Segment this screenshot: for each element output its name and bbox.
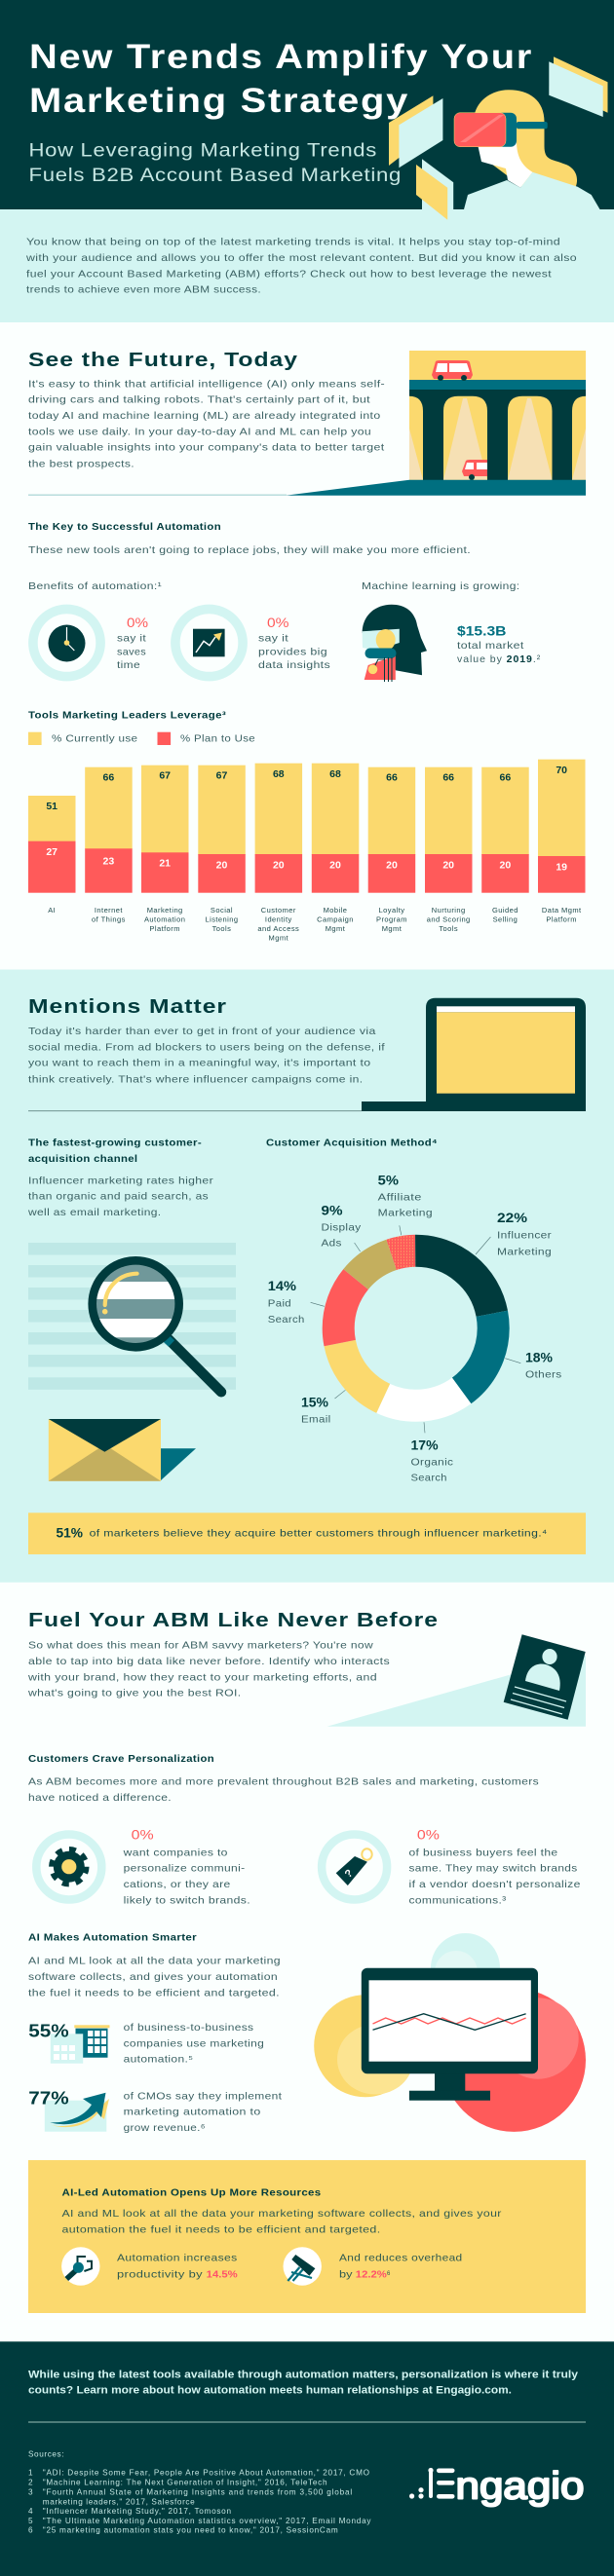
category labels: Listening (205, 915, 239, 923)
subtitle (29, 140, 402, 186)
stat: want personalization: personalize communi- (124, 1863, 246, 1875)
legend (28, 732, 255, 745)
stat: business buyers: same. They may switch brands (409, 1863, 577, 1875)
heading: Mentions Matter: Mentions Matter (28, 996, 227, 1018)
illustration: woman in VR headset (389, 56, 608, 220)
panel: AI-led automation (28, 2160, 586, 2313)
stat: saves time: say it (117, 632, 146, 644)
sources: "Fourth Annual State of Marketing Insights and trends from 3,500 global (43, 2488, 352, 2497)
values: currently use: 66 (386, 772, 398, 784)
icon: calendars (51, 2025, 109, 2064)
text: ABM prevalent: As ABM becomes more and more prevalent throughout B2B sales and marketing, customers (28, 1776, 539, 1788)
stat: 55%: automation.⁵ (124, 2054, 193, 2066)
stat: overhead: 12.2% (356, 2268, 388, 2280)
chart lines (372, 2014, 526, 2030)
subheading: fastest growing: The fastest-growing customer- (28, 1139, 202, 1149)
stat: productivity: Automation increases (117, 2253, 238, 2264)
heading: Fuel Your ABM: Fuel Your ABM Like Never Before (28, 1610, 439, 1631)
category labels: Marketing (147, 906, 183, 915)
hair (474, 90, 577, 190)
donut labels (268, 1173, 561, 1484)
text: influencer rates: than organic and paid search, as (28, 1191, 209, 1203)
values: currently use (46, 765, 567, 812)
legend: % Currently use (52, 733, 137, 745)
body text: AI intro: It's easy to think that artificial intelligence (AI) only means self- (28, 378, 385, 390)
category labels: Selling (493, 915, 518, 923)
values: plan to use: 20 (329, 860, 341, 872)
stat: 77%: marketing automation to (124, 2107, 261, 2118)
body text: mentions: you want to reach them in a meaningful way, it's important to (28, 1058, 370, 1069)
values: currently use: 68 (273, 768, 285, 780)
stat: market value: total market (457, 640, 524, 652)
values: plan to use: 27 (46, 846, 58, 858)
text: AI and ML (28, 1956, 281, 1998)
closing statement (28, 2370, 579, 2397)
light beams (409, 398, 586, 480)
face (478, 141, 532, 188)
stat: saves time: saves (117, 646, 146, 657)
logo: Engagio: ngagio (456, 2466, 585, 2508)
text: AI and ML: the fuel it needs to be efficient and targeted. (28, 1987, 280, 1998)
panel text: AI and ML look at all the data your marketing software collects, and gives your (62, 2208, 502, 2220)
car bottom (462, 460, 487, 480)
category labels: Internet (95, 906, 123, 915)
values: plan to use: 19 (556, 862, 567, 874)
donut labels: 9% (322, 1203, 343, 1217)
body text: AI intro: gain valuable insights into your company's data to better target (28, 442, 384, 454)
category labels: Tools (212, 924, 231, 933)
subheading: personalization: Customers Crave Personalization (28, 1754, 214, 1765)
subheading: fastest growing: acquisition channel (28, 1154, 137, 1165)
bars: plan to use (28, 841, 585, 893)
body text: mentions (28, 1026, 385, 1085)
donut labels: Paid (268, 1298, 291, 1310)
panel text (62, 2208, 502, 2235)
stat: productivity: 14.5% (207, 2268, 238, 2280)
bridge piers (409, 390, 586, 480)
donut labels: Ads (322, 1237, 342, 1249)
icon: gear (36, 1835, 101, 1899)
illustration: monitor with chart (314, 1933, 586, 2132)
stat: saves time (117, 616, 148, 671)
category labels: Campaign (317, 915, 354, 923)
category labels: Customer (261, 906, 296, 915)
values: plan to use: 23 (103, 855, 114, 867)
body text: mentions: social media. From ad blockers to users being on the defense, if (28, 1041, 385, 1053)
category labels: Data Mgmt (542, 906, 582, 915)
category labels: Mgmt (269, 933, 289, 942)
title (29, 38, 533, 120)
stat: 77%: of CMOs say they implement (124, 2090, 282, 2102)
category labels: and Scoring (427, 915, 471, 923)
donut labels: Marketing (497, 1246, 552, 1257)
stat: overhead: And reduces overhead (339, 2253, 462, 2264)
stat: 55%: companies use marketing (124, 2037, 264, 2049)
icon: magnifying glass (93, 1260, 221, 1392)
logo: Engagio (409, 2466, 585, 2508)
body text: AI intro: tools we use daily. In your day-to-day AI and ML can help you (28, 426, 371, 437)
sources: 2 (28, 2479, 33, 2487)
donut chart (338, 1251, 493, 1405)
sources (28, 2449, 371, 2535)
sources: 5 (28, 2517, 33, 2525)
text: AI and ML: AI and ML look at all the data your marketing (28, 1956, 281, 1967)
stat: data insights: data insights (258, 659, 330, 671)
panel text: automation the fuel it needs to be efficient and targeted. (62, 2223, 380, 2235)
stat: 55%: of business-to-business (124, 2022, 253, 2034)
category labels: Mgmt (382, 924, 403, 933)
body text: fuel: what's going to give you the best ROI. (27, 1688, 242, 1699)
text: ABM prevalent (28, 1776, 539, 1804)
sources: marketing leaders," 2017, Salesforce (43, 2497, 195, 2506)
illustration: profile card (327, 1634, 586, 1727)
stat: business buyers: of business buyers feel the (409, 1847, 557, 1858)
closing statement: While using the latest tools available through automation matters, personalization is where it truly (28, 2370, 579, 2381)
donut labels: Organic (411, 1456, 453, 1468)
category labels: Automation (144, 915, 185, 923)
text: more efficient: These new tools aren't going to replace jobs, they will make you more efficient. (28, 544, 471, 556)
donut labels: Email (301, 1413, 331, 1425)
category labels: Mgmt (326, 924, 346, 933)
stat: business buyers (409, 1827, 581, 1907)
title: New Trends Amplify Your (29, 38, 533, 76)
illustration: bridge with cars (28, 351, 586, 496)
category labels: AI (48, 906, 56, 915)
body text: fuel: So what does this mean for ABM savvy marketers? You're now (28, 1640, 373, 1652)
car top (432, 360, 473, 381)
stat: business buyers: if a vendor doesn't personalize (409, 1879, 581, 1890)
values: plan to use (46, 846, 567, 874)
category labels: Platform (149, 924, 180, 933)
donut labels: Marketing (378, 1208, 433, 1219)
sources: "Machine Learning: The Next Generation of Insight," 2016, TeleTech (43, 2479, 327, 2487)
stat: data insights (258, 616, 330, 671)
callout: 51% of marketers: 51% (57, 1525, 83, 1540)
stat: 77% (28, 2088, 282, 2134)
bar chart: tools (28, 760, 585, 942)
floating panel left (389, 95, 442, 168)
icon: rising arrow (45, 2093, 109, 2132)
callout: 51% of marketers (28, 1512, 586, 1554)
donut labels: 15% (301, 1395, 328, 1409)
sources: "ADI: Despite Some Fear, People Are Positive About Automation," 2017, CMO (43, 2469, 369, 2478)
donut labels: Display (322, 1221, 362, 1233)
values: plan to use: 20 (500, 860, 511, 872)
body text: mentions: think creatively. That's where influencer campaigns come in. (28, 1073, 363, 1085)
category labels: Guided (492, 906, 518, 915)
values: plan to use: 20 (386, 860, 398, 872)
text: AI and ML: software collects, and gives your automation (28, 1971, 278, 1983)
stat: want personalization: want companies to (122, 1847, 228, 1858)
document stripes (28, 1243, 236, 1390)
intro text: with your audience and allows you to offer the most relevant content. But did you know it can also (25, 252, 577, 264)
stat: market value: $15.3B (457, 623, 507, 638)
subtitle: Fuels B2B Account Based Marketing (29, 165, 402, 186)
donut labels: Search (268, 1314, 305, 1325)
sources: 4 (28, 2507, 33, 2516)
bars: currently use (28, 760, 585, 857)
headset (454, 113, 548, 147)
donut labels: 22% (497, 1211, 527, 1225)
category labels: Social (211, 906, 233, 915)
body text: mentions: Today it's harder than ever to get in front of your audience via (28, 1026, 376, 1037)
category labels (48, 906, 582, 942)
heading: See the Future, Today: See the Future, Today (28, 350, 298, 371)
sources: 1 (28, 2469, 33, 2478)
panel: Mentions Matter (0, 970, 614, 1583)
icon: price tag (322, 1835, 387, 1899)
values: plan to use: 20 (442, 860, 454, 872)
category labels: Identity (265, 915, 292, 923)
text: influencer rates (27, 1175, 213, 1218)
values: plan to use: 20 (216, 860, 227, 872)
floating panel right (549, 56, 608, 117)
stat: productivity: productivity by (117, 2268, 204, 2280)
body text: AI intro: today AI and machine learning (ML) are already integrated into (28, 410, 381, 422)
stat: data insights: 0% (267, 616, 288, 630)
stat: want personalization: 0% (132, 1827, 154, 1842)
icon: clock (33, 609, 100, 677)
category labels: Mobile (324, 906, 347, 915)
stat: 55% (28, 2021, 264, 2066)
body text: AI intro (28, 378, 385, 469)
panel: header (0, 0, 614, 209)
stat: saves time: time (117, 659, 140, 671)
values: currently use: 66 (103, 772, 114, 784)
donut labels: 14% (268, 1279, 296, 1293)
values: plan to use: 21 (159, 858, 171, 870)
subheading: fastest growing (28, 1139, 202, 1165)
stat: overhead: by (339, 2268, 353, 2280)
body text: fuel: with your brand, how they react to your marketing efforts, and (27, 1671, 377, 1683)
stat: business buyers: communications.³ (409, 1895, 507, 1907)
intro text: trends to achieve even more ABM success. (26, 284, 261, 296)
values: currently use: 70 (556, 765, 567, 776)
stat: market value (457, 623, 541, 665)
stat: 77%: grow revenue.⁶ (124, 2122, 206, 2134)
intro text (25, 237, 577, 296)
subheading: AI-Led Automation Opens Up More Resources (62, 2187, 322, 2198)
sources: "25 marketing automation stats you need to know," 2017, SessionCam (43, 2526, 338, 2535)
sources: Sources: (28, 2449, 64, 2458)
heading: key to automation: The Key to Successful Automation (28, 522, 221, 533)
label: machine learning: Machine learning is growing: (362, 580, 520, 592)
subheading: AI smarter: AI Makes Automation Smarter (28, 1933, 197, 1944)
icon: hammer (283, 2247, 322, 2286)
sources: "The Ultimate Marketing Automation statistics overview," 2017, Email Monday (43, 2517, 371, 2525)
label: benefits: Benefits of automation:¹ (28, 580, 162, 592)
icon: envelope (49, 1419, 196, 1481)
text: influencer rates: Influencer marketing rates higher (28, 1175, 213, 1186)
panel: intro (0, 209, 614, 322)
callout: 51% of marketers: of marketers believe they acquire better customers through influencer marketing.⁴ (90, 1528, 548, 1540)
values: currently use: 66 (442, 772, 454, 784)
body text: fuel: able to tap into big data like never before. Identify who interacts (28, 1656, 390, 1667)
legend: % Plan to Use (180, 733, 255, 745)
icon: robotic arm (61, 2247, 99, 2286)
category labels: Tools (439, 924, 458, 933)
icon: price tag: ? (343, 1867, 356, 1881)
category labels: Program (376, 915, 407, 923)
intro text: You know that being on top of the latest marketing trends is vital. It helps you stay top-of-mind (26, 237, 560, 248)
icon: growth chart (175, 609, 243, 677)
category labels: of Things (92, 915, 126, 923)
category labels: and Access (257, 924, 299, 933)
stat: want personalization: likely to switch brands. (124, 1895, 250, 1907)
stat: overhead (339, 2253, 462, 2280)
text: influencer rates: well as email marketing. (27, 1207, 162, 1218)
floating panel bottom (416, 159, 453, 220)
donut labels: Search (411, 1473, 447, 1484)
body (464, 172, 600, 209)
subtitle: How Leveraging Marketing Trends (29, 140, 377, 162)
values: currently use: 67 (159, 770, 171, 782)
values: currently use: 67 (216, 770, 227, 782)
intro text: fuel your Account Based Marketing (ABM) efforts? Check out how to best leverage the newest (26, 268, 552, 280)
stat: overhead: 6 (387, 2271, 391, 2277)
title: Marketing Strategy (29, 82, 409, 120)
category labels: Platform (546, 915, 577, 923)
sources: 3 (28, 2488, 33, 2497)
body text: AI intro: driving cars and talking robots. That's certainly part of it, but (28, 394, 370, 406)
donut labels: Influencer (497, 1230, 552, 1242)
category labels: Nurturing (432, 906, 466, 915)
stat: want personalization (122, 1827, 250, 1907)
stat: market value: value by 2019.² (457, 653, 541, 665)
donut labels: 5% (378, 1173, 399, 1187)
values: currently use: 68 (329, 768, 341, 780)
donut labels: 17% (411, 1437, 439, 1452)
stat: 77%: 77% (28, 2088, 69, 2109)
stat: data insights: say it (258, 632, 288, 644)
illustration: laptop (28, 998, 586, 1111)
icon: head silhouette (363, 605, 427, 682)
values: currently use: 66 (500, 772, 511, 784)
body text: fuel (27, 1640, 390, 1699)
stat: 55%: 55% (28, 2021, 69, 2041)
stat: want personalization: cations, or they are (124, 1879, 231, 1890)
panel: footer (0, 2341, 614, 2576)
stat: business buyers: 0% (417, 1827, 440, 1842)
sources: "Influencer Marketing Study," 2017, Tomoson (43, 2507, 231, 2516)
sources: 6 (28, 2526, 33, 2535)
stat: productivity (117, 2253, 238, 2280)
body text: AI intro: the best prospects. (28, 458, 134, 469)
subheading: acquisition chart: Customer Acquisition Method⁴ (266, 1139, 438, 1149)
values: currently use: 51 (46, 801, 58, 812)
heading: tools: Tools Marketing Leaders Leverage³ (28, 710, 226, 721)
category labels: Loyalty (379, 906, 404, 915)
closing statement: counts? Learn more about how automation meets human relationships at Engagio.com. (28, 2385, 512, 2397)
stat: data insights: provides big (258, 646, 327, 657)
values: plan to use: 20 (273, 860, 285, 872)
stat: saves time: 0% (127, 616, 148, 630)
donut labels: 18% (525, 1350, 553, 1364)
text: ABM prevalent: have noticed a difference. (28, 1792, 172, 1804)
donut labels: Affiliate (378, 1191, 422, 1203)
road (286, 480, 586, 496)
donut labels: Others (525, 1368, 561, 1380)
